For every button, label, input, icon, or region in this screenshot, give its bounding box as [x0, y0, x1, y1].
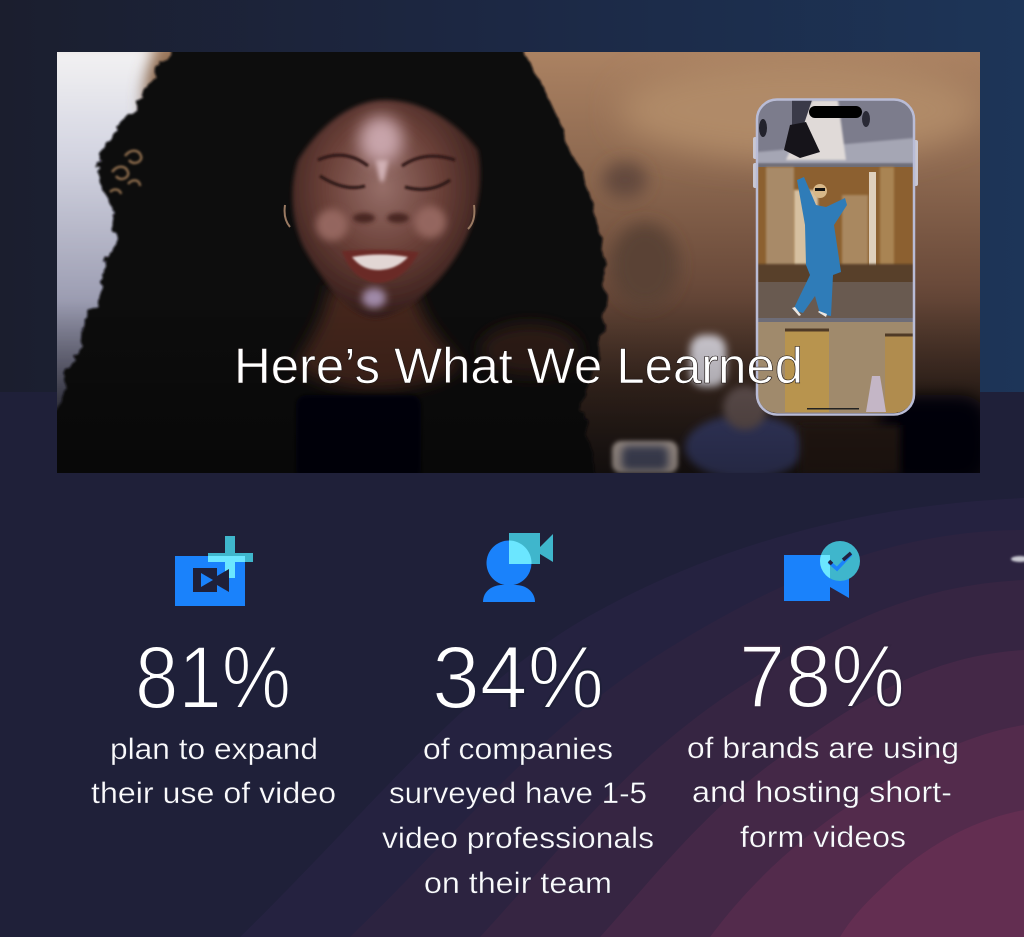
phone frame [757, 100, 914, 414]
description [91, 733, 336, 810]
description: and hosting short- [692, 776, 952, 809]
phone mockup [753, 99, 918, 415]
hero photo panel [57, 52, 980, 473]
held phone [298, 394, 419, 466]
description [687, 732, 959, 854]
description: of companies [423, 733, 613, 766]
curls highlights [110, 151, 141, 194]
mouth [342, 250, 419, 283]
description [382, 733, 654, 900]
notch [809, 106, 862, 118]
stat column: 78% [687, 541, 959, 854]
eyebrows [318, 155, 455, 166]
stat column: 34% [382, 533, 654, 900]
description: form videos [740, 821, 906, 854]
bottom shade [57, 324, 980, 473]
middle video tile [757, 167, 914, 318]
description: surveyed have 1-5 [389, 777, 647, 810]
top video tile [757, 100, 914, 163]
warm halo behind hair [132, 52, 172, 112]
bokeh lights [144, 50, 990, 485]
stat column: 81% [91, 536, 336, 810]
eyes [320, 176, 450, 189]
woman: hair and body [45, 30, 605, 490]
icon: video with check [784, 541, 860, 601]
woman in blue [793, 177, 847, 316]
chest glow [480, 324, 580, 376]
nostrils [353, 213, 375, 223]
number: 34% [432, 627, 604, 727]
icon: person with camera [483, 533, 553, 602]
icon: video plus [175, 536, 253, 606]
description: their use of video [91, 777, 336, 810]
description: video professionals [382, 822, 654, 855]
earrings [285, 205, 474, 229]
title: Here’s What We Learned [234, 338, 803, 394]
description: of brands are using [687, 732, 959, 765]
phone screen [757, 99, 915, 415]
bottom video tile [757, 322, 915, 414]
background wall, left [57, 52, 164, 410]
side buttons [753, 137, 918, 188]
description: plan to expand [110, 733, 318, 766]
description: on their team [424, 867, 612, 900]
face and neck [285, 100, 480, 390]
number: 81% [135, 627, 291, 727]
number: 78% [739, 626, 905, 726]
